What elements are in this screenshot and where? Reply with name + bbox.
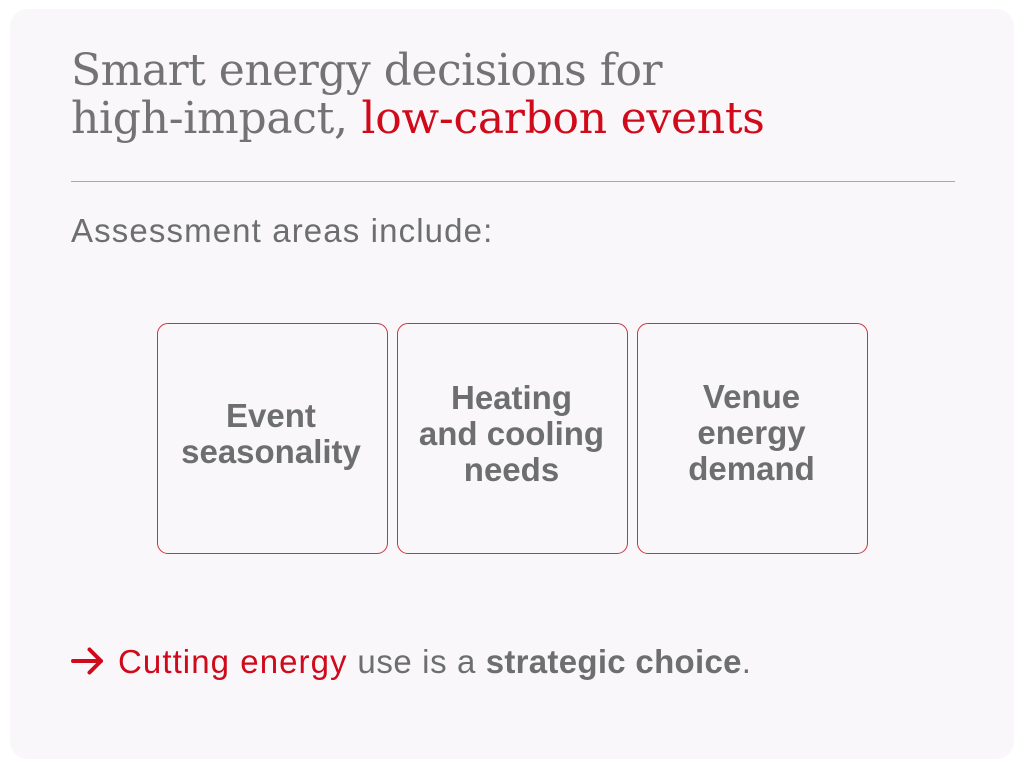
title: high-impact, low-carbon events bbox=[71, 93, 765, 144]
title: Smart energy decisions for bbox=[71, 45, 662, 96]
card: heating and cooling needs: Heating bbox=[451, 379, 572, 416]
card: heating and cooling needs: and cooling bbox=[419, 415, 604, 452]
callout: strategic choice statement: Cutting energy use is a strategic choice. bbox=[118, 643, 752, 680]
icon: arrow bbox=[71, 647, 104, 675]
card: venue energy demand bbox=[636, 322, 868, 554]
card: event seasonality: seasonality bbox=[181, 433, 361, 470]
text: assessment areas intro: Assessment areas include: bbox=[71, 212, 493, 249]
card: heating and cooling needs bbox=[396, 322, 628, 554]
card: venue energy demand: Venue bbox=[703, 378, 800, 415]
card: venue energy demand: energy bbox=[697, 414, 806, 451]
card: event seasonality bbox=[156, 322, 388, 554]
title bbox=[71, 45, 765, 144]
card: event seasonality: Event bbox=[226, 397, 316, 434]
card: venue energy demand: demand bbox=[688, 450, 815, 487]
card: heating and cooling needs: needs bbox=[464, 451, 559, 488]
